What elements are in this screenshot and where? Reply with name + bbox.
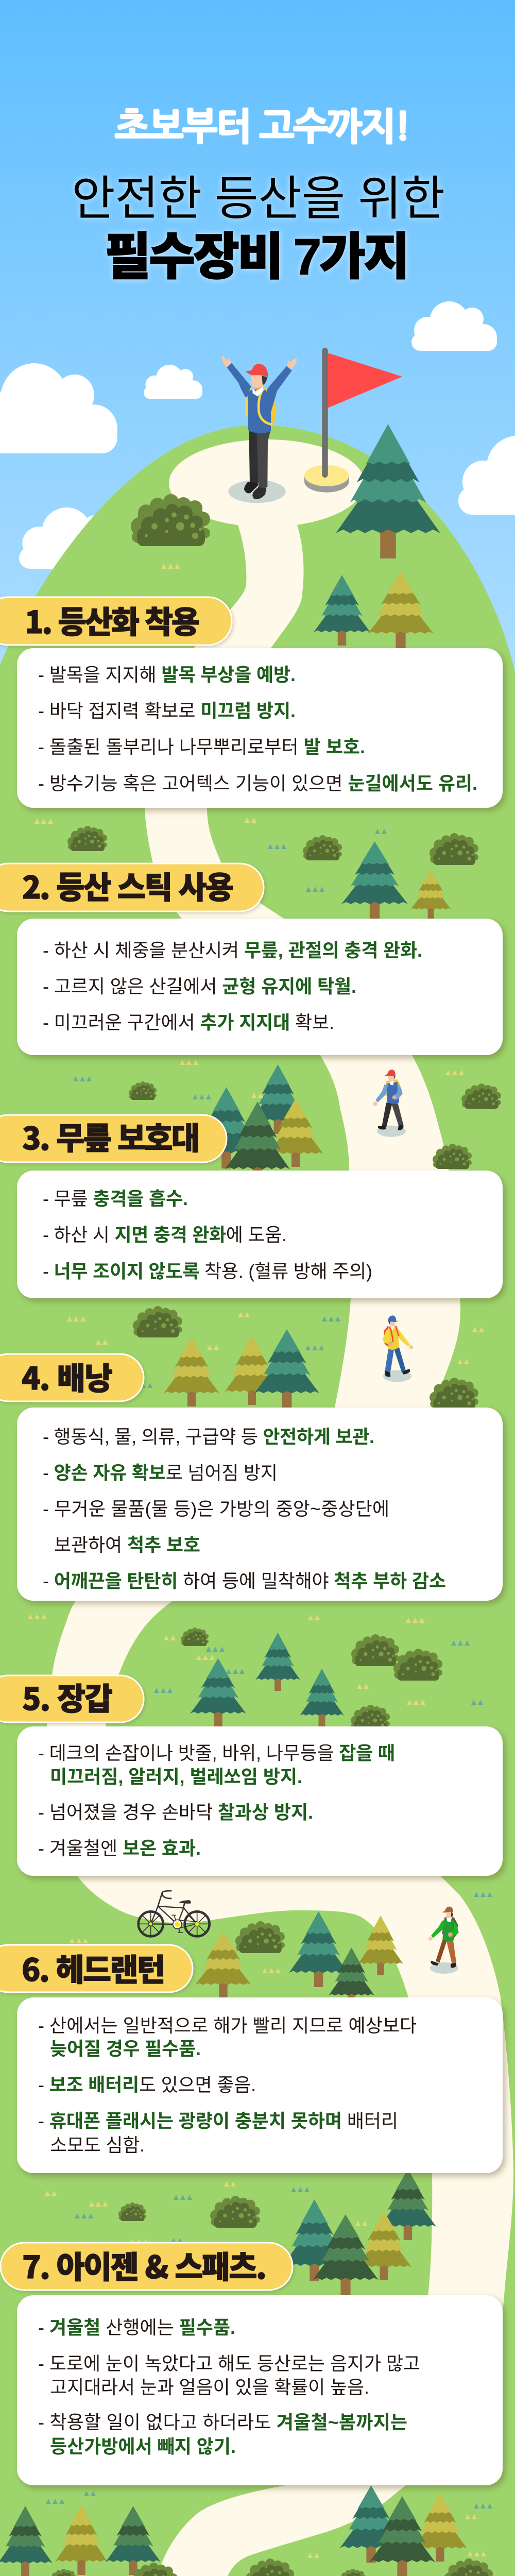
- card 3 text: - 너무 조이지 않도록 착용. (혈류 방해 주의): [43, 1261, 372, 1282]
- card 1 text: - 돌출된 돌부리나 나무뿌리로부터 발 보호.: [38, 736, 365, 757]
- trees: section 4: [164, 1329, 319, 1408]
- summit flag: [304, 348, 402, 493]
- trail: [47, 439, 513, 2576]
- heading 4: [0, 1354, 144, 1401]
- card 1 text: - 발목을 지지해 발목 부상을 예방.: [38, 664, 296, 685]
- card 2 text: - 고르지 않은 산길에서 균형 유지에 탁월.: [43, 976, 356, 997]
- card 5 text: [38, 1742, 395, 1859]
- card 6 text: - 휴대폰 플래시는 광량이 충분치 못하며 배터리: [38, 2110, 398, 2131]
- grass tufts: [28, 564, 492, 2558]
- card 7 text: 등산가방에서 빼지 않기.: [50, 2436, 236, 2457]
- icon: bicycle: [139, 1891, 210, 1936]
- card 7 text: 고지대라서 눈과 얼음이 있을 확률이 높음.: [50, 2377, 369, 2398]
- background: sky gradient: [0, 0, 515, 680]
- panel: 7. crampons and gaiters: [1, 2243, 503, 2485]
- icon: walking hiker in yellow: [383, 1315, 413, 1382]
- heading 1: 1. 등산화 착용: [25, 598, 200, 642]
- heading 4: 4. 배낭: [22, 1354, 113, 1399]
- card 4 text: - 무거운 물품(물 등)은 가방의 중앙~중상단에: [43, 1498, 389, 1519]
- card 6 text: - 산에서는 일반적으로 해가 빨리 지므로 예상보다: [38, 2015, 417, 2036]
- card 4 text: 보관하여 척추 보호: [54, 1534, 200, 1555]
- heading 6: 6. 헤드랜턴: [22, 1945, 165, 1990]
- card 6 text: [38, 2015, 417, 2156]
- heading 7: 7. 아이젠 & 스패츠.: [22, 2243, 267, 2287]
- card 5 text: 미끄러짐, 알러지, 벌레쏘임 방지.: [50, 1766, 302, 1787]
- card 6 text: 늦어질 경우 필수품.: [50, 2038, 201, 2059]
- card 2 text: - 하산 시 체중을 분산시켜 무릎, 관절의 충격 완화.: [43, 940, 422, 961]
- card 2 text: [43, 940, 422, 1033]
- card 5: [17, 1726, 503, 1876]
- card 4: [17, 1408, 503, 1601]
- panel: 4. backpack: [0, 1354, 503, 1601]
- panel: 6. headlamp: [0, 1945, 503, 2173]
- card 4 text: [43, 1426, 446, 1591]
- trees: section 6: [195, 1911, 403, 2007]
- trees: section 2: [341, 841, 451, 919]
- clouds: [0, 301, 515, 569]
- card 7 text: [38, 2317, 420, 2457]
- card 1 text: - 바닥 접지력 확보로 미끄럼 방지.: [38, 700, 296, 721]
- panel: 5. gloves: [0, 1674, 503, 1876]
- heading 3: 3. 무릎 보호대: [22, 1114, 200, 1159]
- title: [72, 108, 445, 285]
- heading 5: [0, 1674, 144, 1722]
- card 4 text: - 양손 자유 확보로 넘어짐 방지: [43, 1462, 278, 1483]
- trees: section 3: [195, 1064, 323, 1185]
- card 4 text: - 어깨끈을 탄탄히 하여 등에 밀착해야 척추 부하 감소: [43, 1570, 446, 1591]
- card 1 text: - 방수기능 혹은 고어텍스 기능이 있으면 눈길에서도 유리.: [38, 773, 477, 794]
- trees: summit and section 1: [314, 424, 440, 648]
- card 5 text: - 넘어졌을 경우 손바닥 찰과상 방지.: [38, 1802, 313, 1823]
- card 3 text: [43, 1188, 372, 1282]
- card 7 text: - 도로에 눈이 녹았다고 해도 등산로는 음지가 많고: [38, 2353, 420, 2374]
- icon: walking hiker in green: [428, 1907, 459, 1974]
- card 6 text: - 보조 배터리도 있으면 좋음.: [38, 2074, 256, 2095]
- title: line 2: 필수장비 7가지: [105, 228, 410, 285]
- heading 2: 2. 등산 스틱 사용: [22, 863, 234, 908]
- card 7: [17, 2295, 503, 2485]
- card 1 text: [38, 664, 477, 794]
- panel: 1. hiking boots: [0, 597, 503, 808]
- card 3 text: - 무릎 충격을 흡수.: [43, 1188, 188, 1209]
- card 1: [17, 648, 503, 808]
- panel: 3. knee support: [0, 1114, 503, 1298]
- card 5 text: - 겨울철엔 보온 효과.: [38, 1838, 201, 1859]
- heading 5: 5. 장갑: [22, 1674, 113, 1719]
- title: line 1: 안전한 등산을 위한: [72, 173, 445, 225]
- trees: section 5: [190, 1633, 344, 1726]
- trees: section 7: [283, 2169, 436, 2295]
- panel: 2. trekking poles: [0, 863, 503, 1055]
- card 2 text: - 미끄러운 구간에서 추가 지지대 확보.: [43, 1012, 334, 1033]
- card 6 text: 소모도 심함.: [50, 2134, 145, 2156]
- card 7 text: - 착용할 일이 없다고 하더라도 겨울철~봄까지는: [38, 2412, 407, 2433]
- card 2: [17, 919, 503, 1055]
- card 6: [17, 1997, 503, 2173]
- card 3: [17, 1171, 503, 1298]
- trees: bottom: [0, 2485, 467, 2576]
- card 3 text: - 하산 시 지면 충격 완화에 도움.: [43, 1224, 287, 1245]
- card 4 text: - 행동식, 물, 의류, 구급약 등 안전하게 보관.: [43, 1426, 374, 1447]
- card 5 text: - 데크의 손잡이나 밧줄, 바위, 나무등을 잡을 때: [38, 1742, 395, 1764]
- icon: walking hiker with blue vest: [373, 1070, 406, 1137]
- bushes: [49, 494, 501, 2576]
- card 7 text: - 겨울철 산행에는 필수품.: [38, 2317, 235, 2338]
- title: eyebrow: 초보부터 고수까지!: [115, 108, 410, 145]
- icon: main hiker with raised arms: [222, 356, 297, 503]
